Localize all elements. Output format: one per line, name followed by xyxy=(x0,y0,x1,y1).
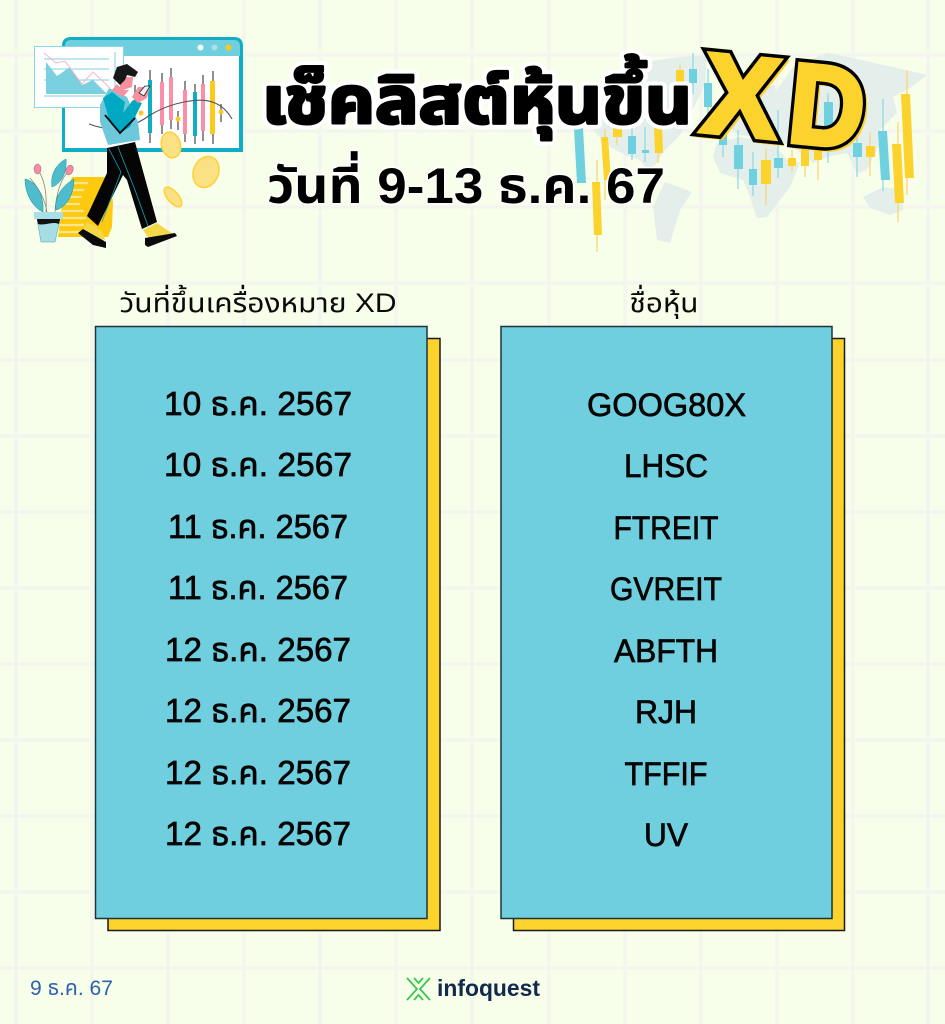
title badge: XD: D xyxy=(784,41,871,173)
panel: XD dates: 12 ธ.ค. 2567 xyxy=(165,631,351,668)
footer date: 9 ธ.ค. 67 xyxy=(30,977,113,1000)
gold coins xyxy=(158,130,224,210)
panel: stock names: ABFTH xyxy=(614,633,718,669)
small area chart card xyxy=(34,46,124,108)
potted plant xyxy=(25,159,75,242)
world map background xyxy=(593,53,927,243)
title: checklist: เช็คลิสต์หุ้นขึ้น xyxy=(262,54,692,140)
illustration: investor with charts, coins and plant xyxy=(25,37,243,248)
panel: XD dates: 12 ธ.ค. 2567 xyxy=(165,692,351,729)
panel: stock names: LHSC xyxy=(624,448,708,484)
panel: stock names: UV xyxy=(644,817,689,853)
panel: stock names: GOOG80X xyxy=(587,387,746,423)
panel: XD dates: 12 ธ.ค. 2567 xyxy=(165,754,351,791)
man walking with phone xyxy=(78,64,177,248)
panel: stock names xyxy=(501,326,844,930)
title badge: XD: X xyxy=(698,29,785,162)
panel: stock names: RJH xyxy=(635,694,697,730)
logo: infoquest: infoquest xyxy=(437,975,540,1001)
title badge: XD: D xyxy=(787,44,874,176)
panel: XD dates: 10 ธ.ค. 2567 xyxy=(164,446,352,483)
panel: XD dates xyxy=(96,326,440,930)
title badge: XD: X xyxy=(698,29,785,162)
browser window chart xyxy=(62,37,243,152)
panel: XD dates: 12 ธ.ค. 2567 xyxy=(165,815,351,852)
title badge: XD: X xyxy=(701,32,788,165)
title badge: XD xyxy=(698,29,874,176)
gold coin stack xyxy=(58,177,113,237)
column heading: stock name: ชื่อหุ้น xyxy=(630,284,698,319)
title: checklist: เช็คลิสต์หุ้นขึ้น xyxy=(262,54,692,140)
subtitle: date range: วันที่ 9-13 ธ.ค. 67 xyxy=(267,151,665,214)
column heading: XD date: วันที่ขึ้นเครื่องหมาย XD xyxy=(120,284,396,318)
panel: stock names: TFFIF xyxy=(624,756,708,792)
panel: XD dates: 11 ธ.ค. 2567 xyxy=(168,508,348,545)
candlestick chart background xyxy=(574,53,914,252)
panel: stock names: GVREIT xyxy=(610,571,722,607)
panel: XD dates: 11 ธ.ค. 2567 xyxy=(168,569,348,606)
panel: stock names: FTREIT xyxy=(614,510,718,546)
title badge: XD: D xyxy=(784,41,871,173)
panel: XD dates: 10 ธ.ค. 2567 xyxy=(164,385,352,422)
